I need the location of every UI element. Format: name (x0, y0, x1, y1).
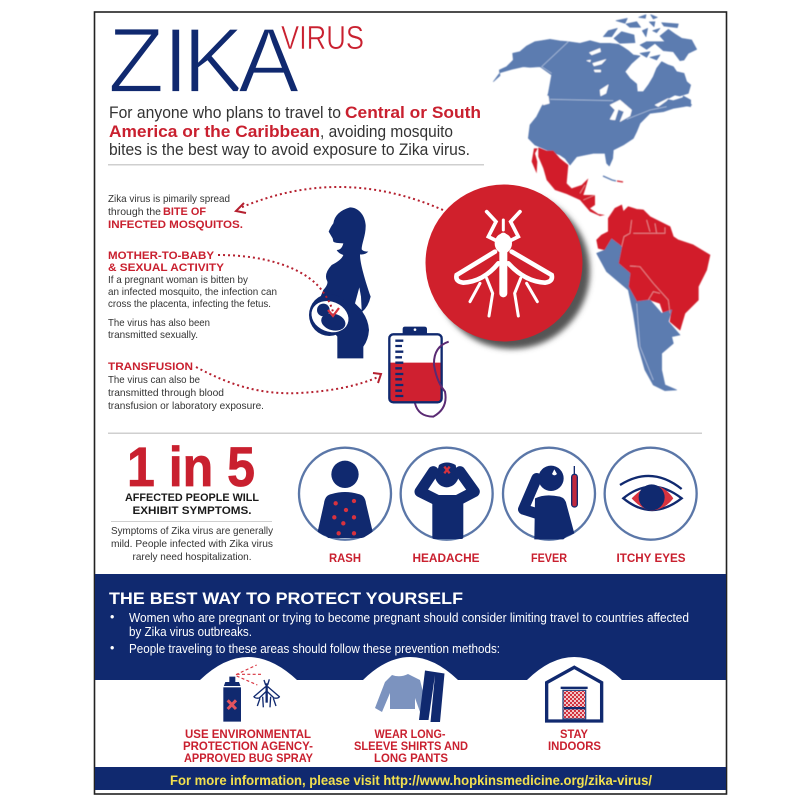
red circle (426, 184, 582, 342)
prevention labels: bug spray: USE ENVIRONMENTAL (185, 729, 311, 741)
text: mother-to-baby and sexual activity: an infected mosquito, the infection can (108, 286, 277, 298)
arrow: transfusion to blood bag (196, 367, 381, 393)
icon: rash (299, 448, 391, 540)
icon: long pants (419, 670, 444, 722)
intro text: Central or South (345, 103, 481, 122)
text: mother-to-baby and sexual activity: The virus has also been (108, 317, 210, 329)
symptom labels: FEVER (531, 553, 568, 565)
prevention labels: clothing: WEAR LONG- (374, 729, 446, 741)
symptom labels (329, 553, 686, 565)
prevention labels: indoors: STAY (560, 729, 588, 741)
text: bite of infected mosquitos (108, 193, 243, 231)
text: bite of infected mosquitos: through the (108, 206, 161, 218)
prevention labels: bug spray: APPROVED BUG SPRAY (184, 753, 313, 765)
text: transfusion: The virus can also be (108, 374, 200, 386)
lakes and water (542, 48, 668, 122)
icon: pregnant woman (307, 207, 371, 358)
VIRUS wordmark: VIRUS (281, 19, 364, 56)
protection bullets: • (110, 641, 114, 655)
prevention labels: clothing (354, 729, 468, 765)
title (108, 10, 364, 112)
footer link text: For more information, please visit http://www.hopkinsmedicine.org/zika-virus/ (170, 773, 652, 788)
prevention labels: bug spray (183, 729, 313, 765)
statistic caption: AFFECTED PEOPLE WILL (125, 492, 259, 504)
intro text: , avoiding mosquito (320, 122, 453, 141)
prevention labels: bug spray: PROTECTION AGENCY- (183, 741, 313, 753)
protection bullets: by Zika virus outbreaks. (129, 625, 252, 639)
text: bite of infected mosquitos: BITE OF (163, 206, 206, 218)
arrow: mosquito to bite text (236, 187, 443, 213)
South America affected countries (597, 205, 710, 330)
symptoms description: Symptoms of Zika virus are generally (111, 525, 274, 537)
text: mother-to-baby and sexual activity: MOTHER-TO-BABY (108, 250, 215, 262)
text: transfusion (108, 361, 264, 412)
protection bullets (110, 610, 689, 656)
symptoms description (111, 525, 274, 563)
text: mother-to-baby and sexual activity: transmitted sexually. (108, 329, 198, 341)
intro text: bites is the best way to avoid exposure to Zika virus. (109, 140, 470, 159)
panel: protection band (95, 574, 726, 680)
protection bullets: Women who are pregnant or trying to become pregnant should consider limiting travel to countries affected (129, 611, 689, 625)
intro text: For anyone who plans to travel to (109, 103, 341, 122)
Mexico and Central America (532, 147, 605, 216)
icon: bug spray (223, 665, 279, 722)
protection bullets: • (110, 610, 114, 624)
prevention labels: clothing: LONG PANTS (374, 753, 448, 765)
protection heading: THE BEST WAY TO PROTECT YOURSELF (109, 589, 463, 608)
symptom labels: RASH (329, 553, 361, 565)
icon: fever (503, 448, 595, 540)
icon: long-sleeve shirt (375, 674, 427, 712)
intro text: America or the Caribbean (109, 122, 320, 141)
text: mother-to-baby and sexual activity: If a pregnant woman is bitten by (108, 274, 249, 286)
big number: 1 in 5 (127, 435, 255, 498)
map of the Americas (493, 15, 710, 391)
protection bullets: People traveling to these areas should follow these prevention methods: (129, 642, 500, 656)
symptoms description: rarely need hospitalization. (132, 551, 252, 563)
text: mother-to-baby and sexual activity: cross the placenta, infecting the fetus. (108, 298, 271, 310)
text: mother-to-baby and sexual activity (108, 250, 277, 341)
text: transfusion: transmitted through blood (108, 387, 224, 399)
intro text (109, 103, 481, 159)
icon: itchy eyes (605, 448, 697, 540)
South America unaffected countries (597, 239, 680, 391)
text: mother-to-baby and sexual activity: & SEXUAL ACTIVITY (108, 262, 225, 274)
mosquito (456, 212, 552, 316)
1 in 5 statistic (111, 435, 274, 563)
statistic caption (125, 492, 259, 517)
icon: house with window (547, 667, 602, 721)
South America borders (580, 185, 670, 380)
symptom labels: HEADACHE (412, 553, 480, 565)
prevention labels: clothing: SLEEVE SHIRTS AND (354, 741, 468, 753)
symptoms description: mild. People infected with Zika virus (111, 538, 273, 550)
arrow: mother-to-baby to fetus (218, 255, 339, 316)
icon: headache (401, 448, 493, 540)
icon: mosquito in red circle (426, 184, 590, 349)
prevention labels: indoors (548, 729, 601, 753)
text: bite of infected mosquitos: Zika virus is pimarily spread (108, 193, 230, 205)
Caribbean islands (603, 176, 616, 181)
prevention labels: indoors: INDOORS (548, 741, 601, 753)
circle shadow (434, 193, 590, 349)
North America (493, 15, 697, 166)
symptom labels: ITCHY EYES (616, 553, 686, 565)
footer band (95, 767, 726, 790)
icon: blood bag (389, 327, 449, 417)
ZIKA wordmark: ZIKA (108, 10, 300, 112)
North America borders (542, 42, 667, 119)
text: transfusion: TRANSFUSION (108, 361, 193, 373)
text: transfusion: transfusion or laboratory exposure. (108, 400, 264, 412)
text: bite of infected mosquitos: INFECTED MOSQUITOS. (108, 219, 243, 231)
statistic caption: EXHIBIT SYMPTOMS. (132, 505, 252, 517)
